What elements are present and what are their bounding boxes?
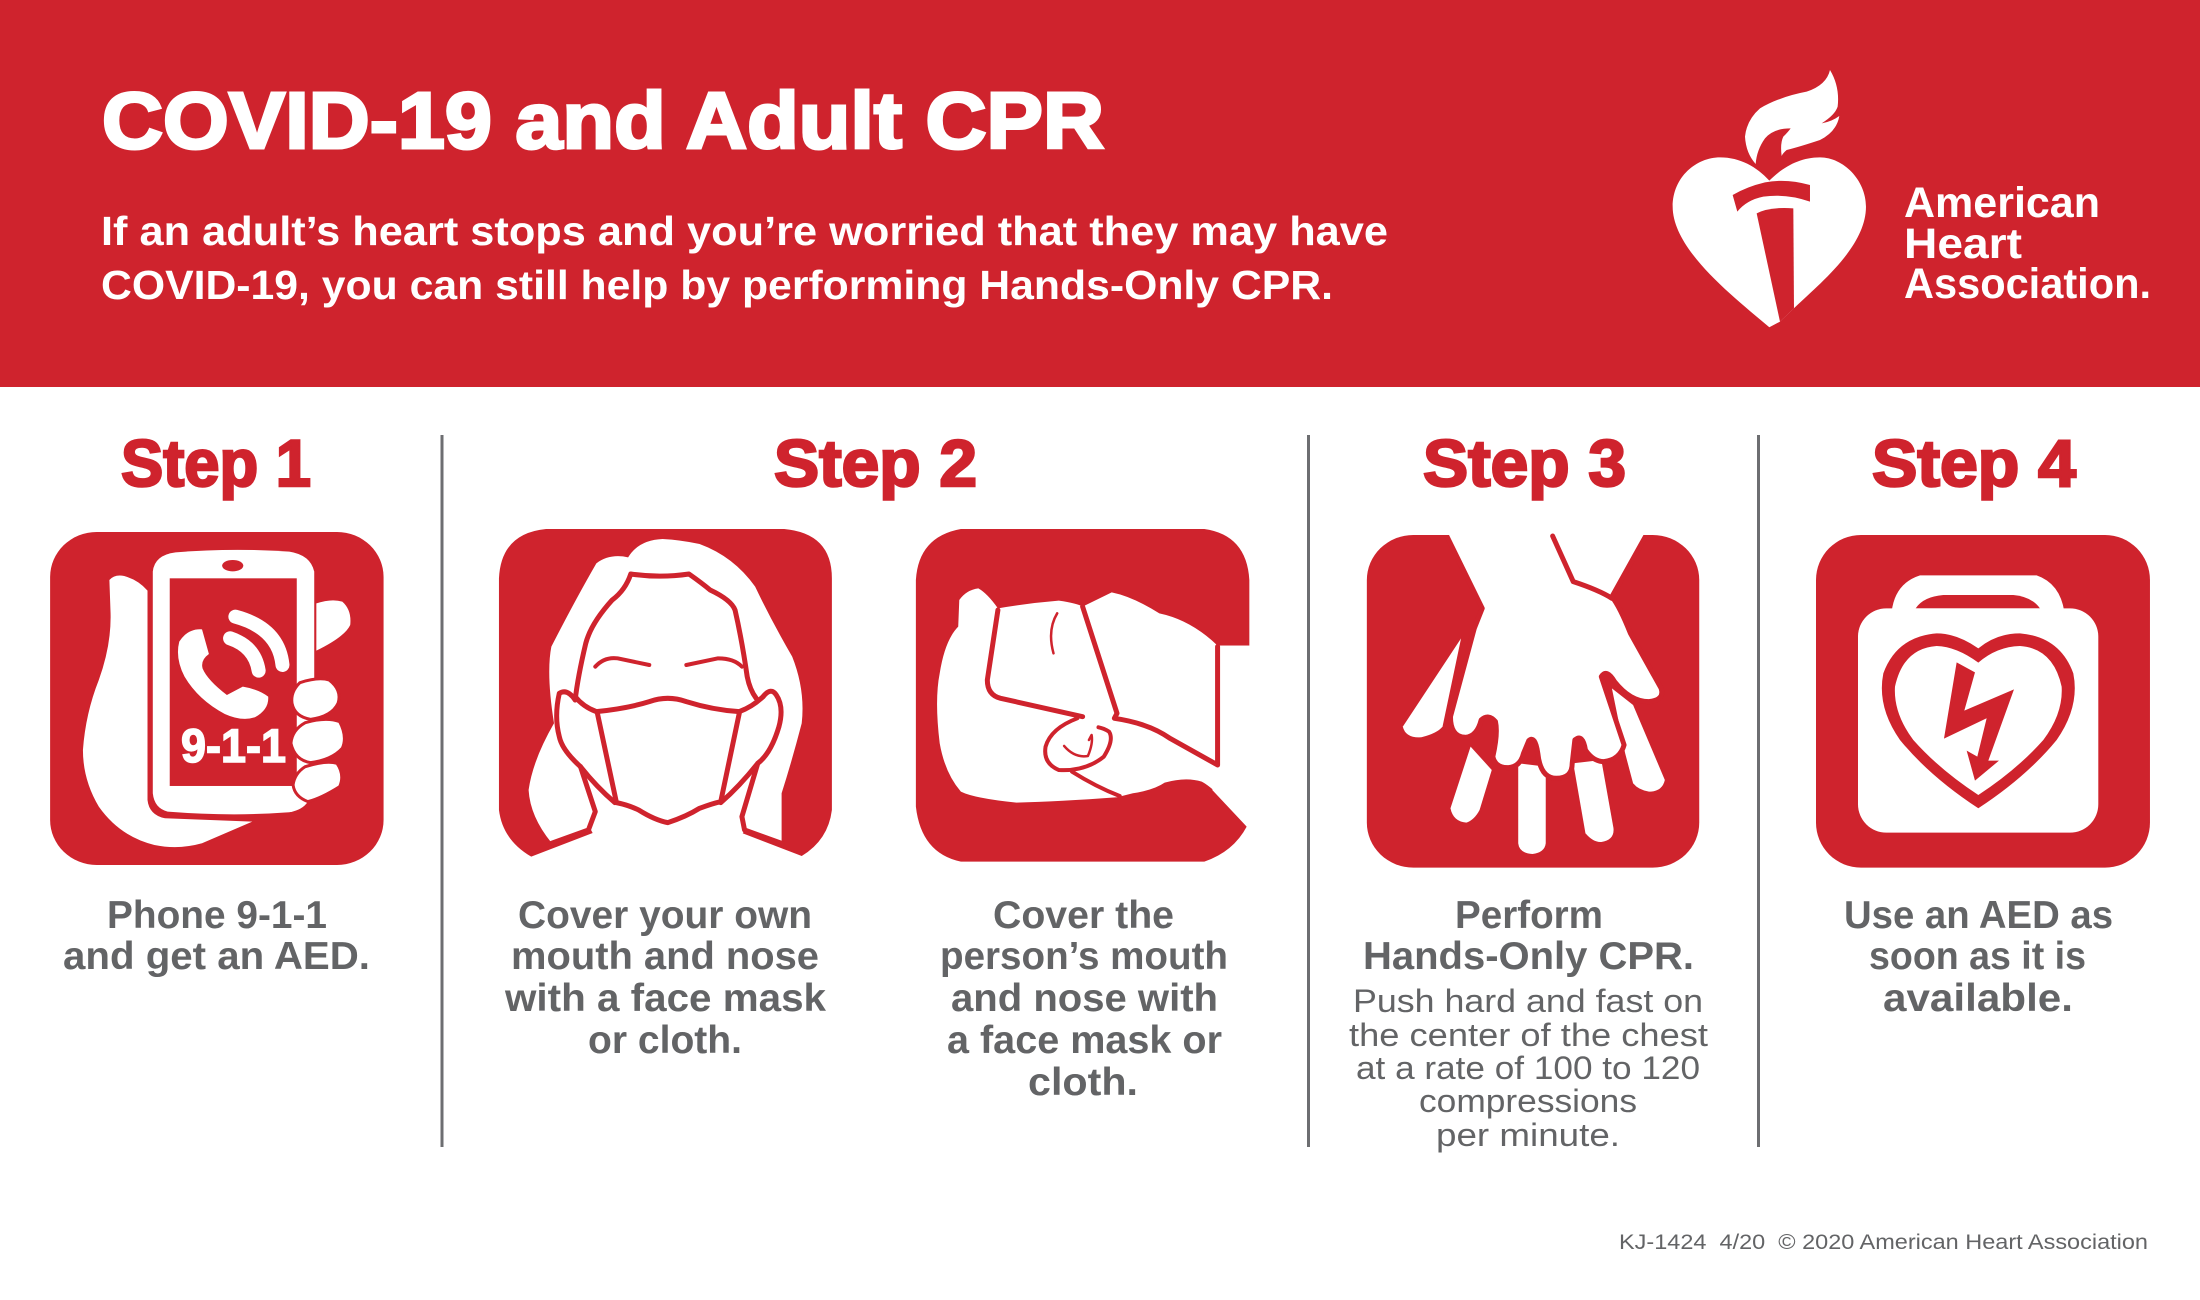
heading: step 3: Step 3 xyxy=(1423,426,1626,500)
step 2 covering description: and nose with xyxy=(951,977,1218,1020)
icon: hand holding phone xyxy=(50,532,384,865)
heading: step 2: Step 2 xyxy=(774,426,977,500)
step 2 covering description: cloth. xyxy=(1028,1061,1138,1104)
step 3 description: Push hard and fast on xyxy=(1353,983,1703,1019)
step 2 covering description: person’s mouth xyxy=(940,935,1228,978)
step 2 own mask description: or cloth. xyxy=(588,1019,742,1062)
step 3 description: Perform xyxy=(1455,894,1603,937)
step 2 covering description xyxy=(940,894,1228,1104)
step 1 description: Phone 9-1-1 xyxy=(107,894,327,937)
step 4 description xyxy=(1844,894,2113,1020)
title: COVID-19 and Adult CPR xyxy=(102,76,1104,165)
heading: step 4: Step 4 xyxy=(1872,426,2076,500)
heading: step 1: Step 1 xyxy=(121,426,311,500)
panel: step 2 xyxy=(499,426,1249,1104)
header banner xyxy=(0,0,2200,387)
subtitle xyxy=(101,208,1388,308)
step 3 description: the center of the chest xyxy=(1349,1017,1708,1053)
step 2 covering description: Cover the xyxy=(993,894,1174,937)
logo wordmark: American xyxy=(1904,179,2100,227)
icon: covering the person's mouth xyxy=(916,529,1249,862)
step 3 description xyxy=(1349,894,1708,1153)
step 1 description xyxy=(63,894,370,978)
icon: AED case xyxy=(1816,535,2150,868)
step 4 description: Use an AED as xyxy=(1844,894,2113,937)
icon: hand holding phone: 9-1-1 xyxy=(181,719,286,772)
step 2 own mask description: with a face mask xyxy=(504,977,826,1020)
icon: hands-only CPR xyxy=(1367,523,1699,868)
step 2 own mask description xyxy=(504,894,826,1062)
step 3 description: Hands-Only CPR. xyxy=(1363,935,1694,978)
step 4 description: soon as it is xyxy=(1869,935,2086,978)
logo wordmark xyxy=(1904,179,2151,308)
panel: step 3 xyxy=(1349,426,1708,1153)
footer credit: KJ-1424 4/20 © 2020 American Heart Association xyxy=(1619,1231,2148,1254)
logo: heart and torch xyxy=(1673,70,1866,327)
step 2 covering description: a face mask or xyxy=(947,1019,1222,1062)
step 2 own mask description: Cover your own xyxy=(518,894,812,937)
step 4 description: available. xyxy=(1883,977,2073,1020)
logo wordmark: Association. xyxy=(1904,260,2151,308)
subtitle: If an adult’s heart stops and you’re worried that they may have xyxy=(101,208,1388,254)
step 1 description: and get an AED. xyxy=(63,935,370,978)
logo wordmark: Heart xyxy=(1904,220,2022,268)
step 3 description: at a rate of 100 to 120 xyxy=(1356,1050,1700,1086)
step 3 description: per minute. xyxy=(1436,1117,1620,1153)
step 3 description: compressions xyxy=(1419,1083,1637,1119)
panel: step 1 xyxy=(50,426,384,978)
panel: step 4 xyxy=(1816,426,2150,1020)
step 2 own mask description: mouth and nose xyxy=(511,935,819,978)
subtitle: COVID-19, you can still help by performing Hands-Only CPR. xyxy=(101,262,1333,308)
icon: person wearing face mask xyxy=(499,529,832,857)
